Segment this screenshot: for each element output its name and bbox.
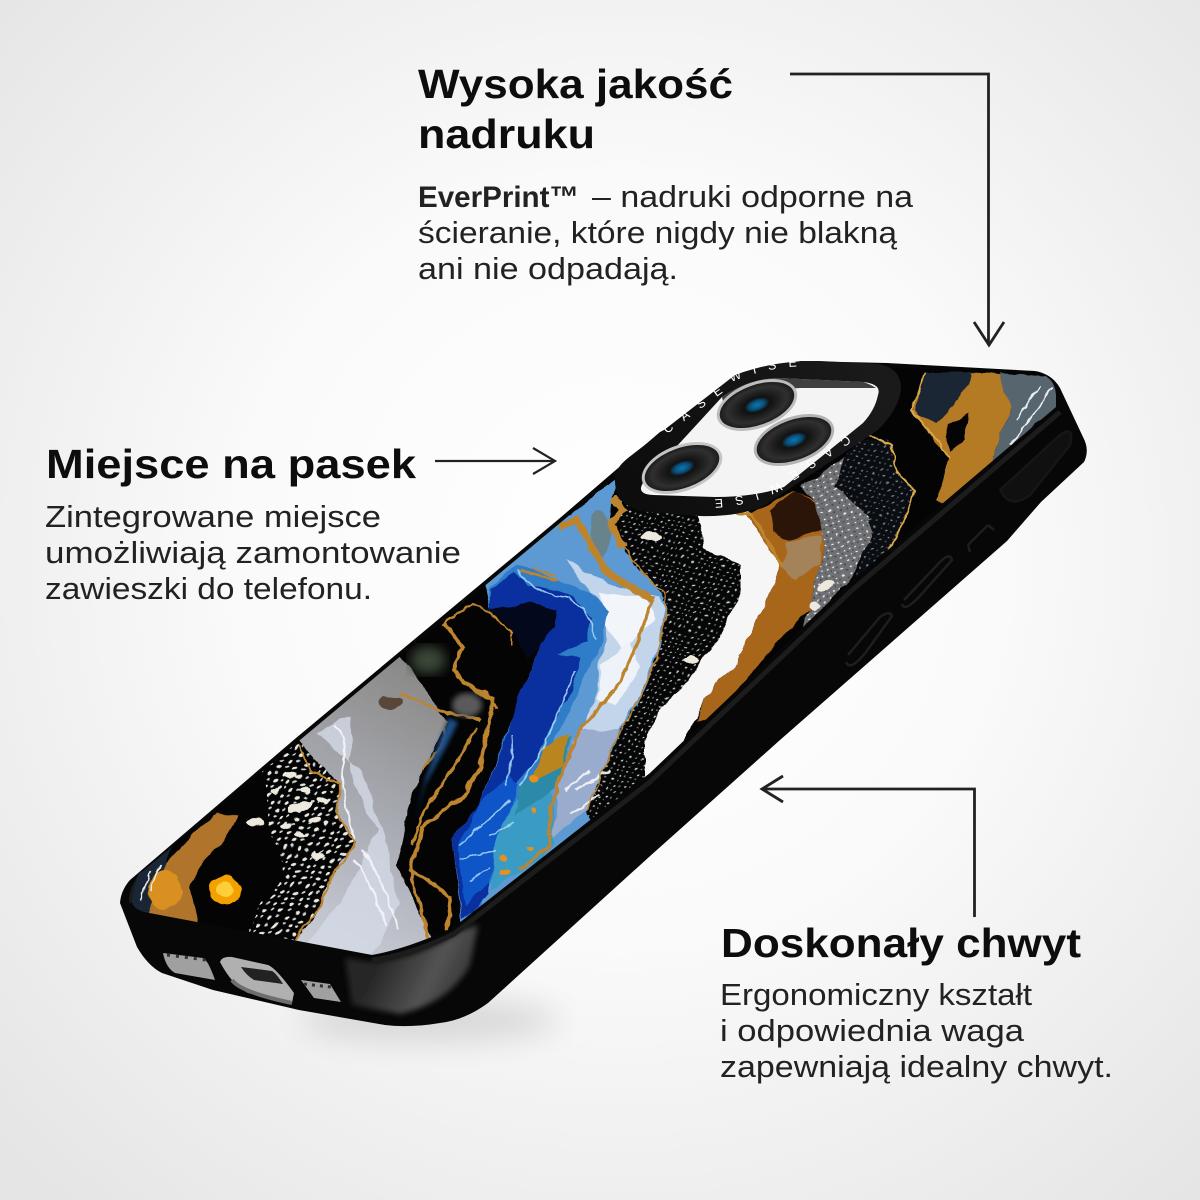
body: strap slot: Zintegrowane miejsce: [45, 499, 381, 534]
marble print: [120, 355, 1070, 965]
callout: print quality: [418, 61, 914, 286]
lens 1: [710, 369, 804, 441]
lens 3: [635, 432, 729, 504]
arrow: strap slot: [435, 448, 555, 474]
case side highlight: [345, 925, 478, 1014]
body: strap slot: umożliwiają zamontowanie: [45, 535, 461, 570]
blue spot teal: [410, 646, 446, 674]
grey marble: [292, 650, 447, 962]
USB port: [220, 957, 294, 1003]
speckled black 1: [248, 738, 355, 945]
heading: print quality: nadruku: [418, 111, 595, 157]
gold top: [911, 372, 1010, 505]
white band: [645, 510, 780, 780]
grey speck band: [800, 457, 870, 635]
phone shadow: [300, 1000, 560, 1040]
corner white lines: [140, 385, 1052, 900]
camera brand text top: CASEWISE: [664, 362, 796, 432]
ports: [163, 953, 341, 1003]
heading: print quality: Wysoka jakość: [418, 61, 733, 107]
camera rim: [615, 361, 901, 516]
body: grip: [720, 977, 1113, 1084]
orange flecks: [499, 775, 539, 876]
camera brand text bottom: CASEWISE: [715, 436, 850, 508]
body: grip: i odpowiednia waga: [720, 1013, 1025, 1048]
body: print quality: – nadruki odporne na: [592, 179, 914, 214]
corner stripes bottom: [132, 846, 172, 913]
body: print quality: ani nie odpadają.: [418, 251, 678, 286]
white streaks: [335, 725, 610, 930]
blue field: [452, 476, 667, 928]
brown band: [698, 490, 825, 722]
lens 2: [747, 404, 841, 476]
body: strap slot: [45, 499, 461, 606]
speaker right: [301, 980, 341, 1002]
speckled black 2: [586, 548, 668, 820]
callout: strap slot: [45, 441, 461, 606]
body: print quality: EverPrint™: [418, 181, 579, 214]
gold band bottom: [146, 812, 238, 926]
arrow: grip: [762, 776, 974, 917]
body: print quality: [418, 179, 914, 286]
arrow: top callout: [790, 74, 1004, 345]
gold veins: [292, 373, 950, 945]
bright spots: [148, 871, 241, 909]
body: strap slot: zawieszki do telefonu.: [45, 571, 372, 606]
heading: grip: Doskonały chwyt: [721, 920, 1081, 966]
heading: print quality: [418, 61, 733, 157]
phone case with marble pattern: [120, 361, 1087, 1026]
speaker left: [163, 953, 215, 980]
speckle accents: [246, 532, 836, 859]
body: print quality: ścieranie, które nigdy nie blakną: [418, 215, 898, 250]
camera module: [614, 361, 901, 516]
body: grip: zapewniają idealny chwyt.: [720, 1049, 1113, 1084]
camera window: [641, 378, 879, 497]
case rim: [132, 412, 1060, 960]
side buttons: [846, 432, 1071, 665]
navy speck band: [835, 437, 913, 590]
top corner stripes: [992, 372, 1060, 463]
callout: grip: [720, 920, 1113, 1084]
heading: strap slot: Miejsce na pasek: [46, 441, 416, 487]
case body: [120, 361, 1087, 1026]
body: grip: Ergonomiczny kształt: [720, 977, 1032, 1012]
